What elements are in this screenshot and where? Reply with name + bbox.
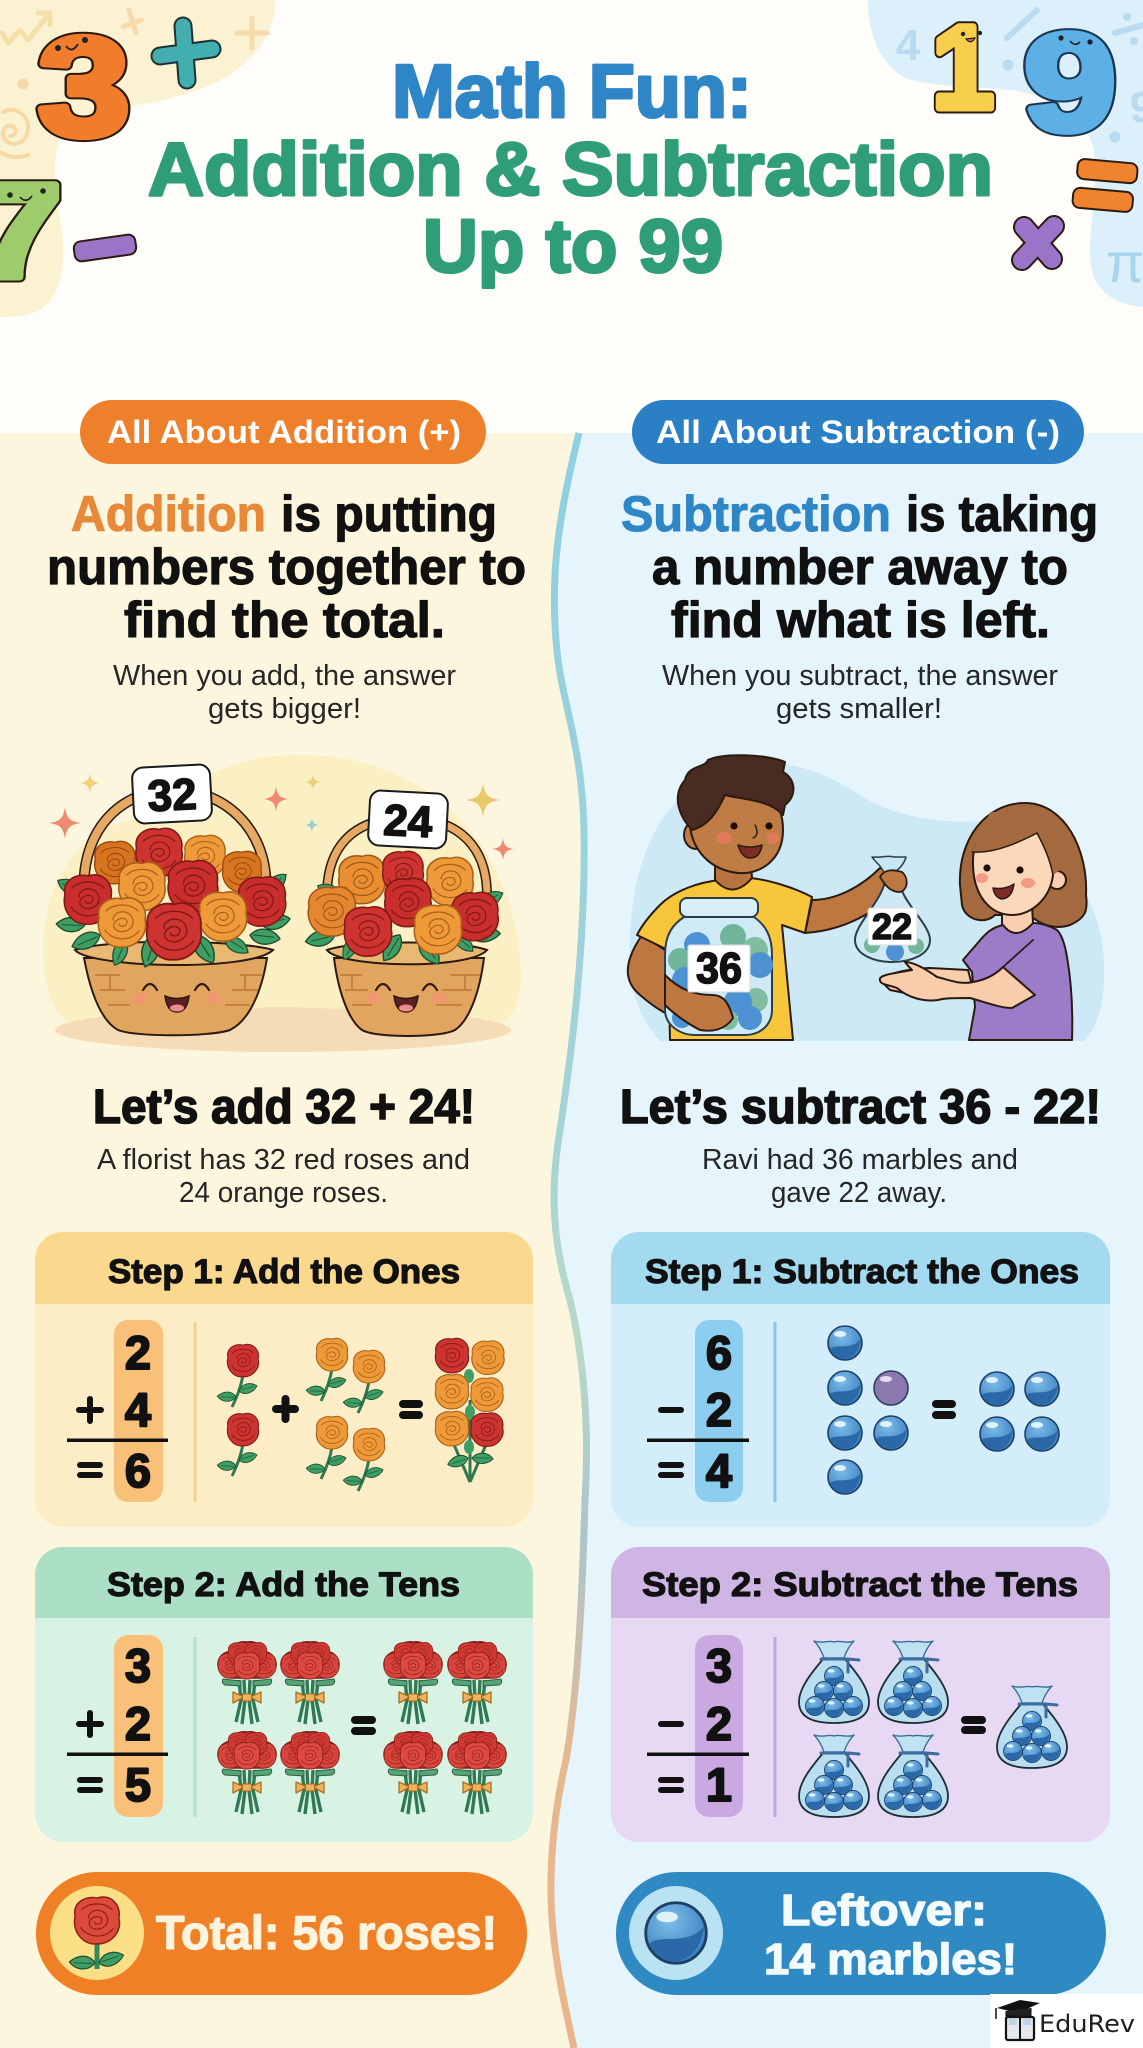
heading: subtraction definition: Subtraction	[621, 486, 891, 542]
pill heading: addition: All About Addition (+)	[107, 414, 461, 450]
column sum: 4	[125, 1383, 151, 1436]
logo: EduRev: EduRev	[1039, 2010, 1135, 2038]
digit 3: 3	[38, 8, 130, 165]
column sum: 3	[125, 1639, 151, 1692]
column difference: 6	[706, 1326, 732, 1379]
result banner: total roses: Total: 56 roses!	[156, 1906, 497, 1959]
column difference: 2	[706, 1697, 732, 1750]
panel: step 2 add the tens	[35, 1547, 533, 1842]
label: 22: 22	[872, 906, 912, 947]
panel: step 1 add the ones	[35, 1232, 533, 1527]
column difference	[647, 1635, 749, 1817]
digit 9: 9	[1024, 6, 1116, 160]
text: subtraction note: When you subtract, the answer	[662, 660, 1058, 692]
heading: addition definition: is putting	[281, 486, 497, 542]
logo: EduRev	[990, 1994, 1143, 2048]
heading: let's subtract: Let’s subtract 36 - 22!	[620, 1081, 1101, 1134]
bags: 3 tens minus 2 tens = 1 ten	[799, 1641, 1067, 1817]
text: florist story: 24 orange roses.	[179, 1177, 388, 1209]
equals sign	[1072, 158, 1138, 213]
panel: step 2 add the tens: Step 2: Add the Tens	[107, 1566, 460, 1604]
panel: addition background	[0, 433, 587, 2048]
minus sign	[73, 234, 137, 262]
text: florist story: A florist has 32 red roses and	[97, 1144, 470, 1176]
basket face	[365, 984, 447, 1012]
title	[148, 49, 993, 288]
panel: step 1 subtract the ones: Step 1: Subtract the Ones	[645, 1253, 1079, 1291]
heading: addition definition	[47, 486, 526, 648]
illustration: flower baskets	[43, 755, 521, 1052]
heading: subtraction definition	[621, 486, 1098, 648]
text: addition note: gets bigger!	[208, 693, 361, 725]
result banner: leftover marbles	[616, 1872, 1106, 1995]
heading: subtraction definition: is taking	[906, 486, 1098, 542]
text: florist story	[97, 1144, 470, 1209]
boy	[628, 755, 903, 1040]
column sum: 2	[125, 1326, 151, 1379]
decoration: top-right number cluster: 4	[896, 21, 921, 70]
girl	[880, 803, 1087, 1040]
multiply sign	[1022, 226, 1054, 260]
result banner: leftover marbles: 14 marbles!	[764, 1935, 1017, 1984]
digit 1: 1	[932, 2, 994, 134]
text: subtraction note: gets smaller!	[776, 693, 942, 725]
sparkles	[49, 773, 514, 860]
marbles: 6 minus 2 = 4	[828, 1326, 1059, 1494]
result banner: total roses	[36, 1872, 527, 1995]
illustration: boy gives marbles to girl	[628, 755, 1104, 1041]
label: 24: 24	[382, 796, 434, 847]
title: Addition & Subtraction	[148, 127, 993, 211]
column difference: 1	[706, 1758, 732, 1811]
decoration: top-left number cluster	[0, 0, 275, 317]
panel: step 1 add the ones: Step 1: Add the Ones	[108, 1253, 460, 1291]
plus sign	[160, 26, 212, 80]
label: 36: 36	[696, 944, 742, 993]
icon: marble	[629, 1886, 723, 1980]
heading: addition definition: find the total.	[124, 592, 445, 648]
pill heading: subtraction: All About Subtraction (-)	[656, 414, 1060, 450]
digit 9: 9	[1024, 6, 1116, 160]
title: Math Fun:	[392, 49, 752, 133]
icon: rose	[50, 1886, 144, 1980]
basket: 32 roses	[55, 764, 291, 1035]
text: Ravi story: gave 22 away.	[771, 1177, 947, 1209]
basket: 24 roses	[305, 790, 506, 1036]
column sum	[67, 1635, 168, 1817]
icon: graduation cap and book	[996, 2000, 1040, 2040]
jar of marbles	[665, 898, 773, 1035]
panel: step 2 subtract the tens: Step 2: Subtract the Tens	[642, 1566, 1078, 1604]
pill heading: addition	[80, 400, 486, 464]
decoration: top-right number cluster	[868, 0, 1143, 307]
heading: let's add: Let’s add 32 + 24!	[93, 1081, 475, 1134]
column difference: 2	[706, 1383, 732, 1436]
column difference: 3	[706, 1639, 732, 1692]
heading: addition definition: Addition	[71, 486, 266, 542]
pill heading: subtraction	[632, 400, 1084, 464]
panel: subtraction background	[500, 433, 1143, 2048]
bouquets: 2 tens + 2 tens = 4 tens	[218, 1642, 506, 1814]
column difference: 4	[706, 1444, 732, 1497]
digit 3: 3	[38, 8, 130, 165]
panel: step 2 subtract the tens	[611, 1547, 1110, 1842]
basket face	[132, 984, 221, 1012]
label: 24	[368, 790, 448, 849]
text: addition note: When you add, the answer	[113, 660, 456, 692]
column sum: 5	[125, 1758, 151, 1811]
heading: subtraction definition: a number away to	[652, 539, 1068, 595]
bag of marbles	[855, 856, 930, 962]
column sum	[67, 1320, 168, 1502]
label: 32: 32	[146, 770, 198, 821]
text: addition note	[113, 660, 456, 725]
column sum: 6	[125, 1444, 151, 1497]
column difference	[647, 1320, 749, 1502]
text: Ravi story: Ravi had 36 marbles and	[702, 1144, 1018, 1176]
label: 32	[132, 764, 212, 824]
heading: addition definition: numbers together to	[47, 539, 526, 595]
column sum: 2	[125, 1697, 151, 1750]
digit 1: 1	[932, 2, 994, 134]
text: subtraction note	[662, 660, 1058, 725]
roses: 2 red + 4 orange = 6	[217, 1338, 504, 1491]
result banner: leftover marbles: Leftover:	[781, 1886, 987, 1935]
title: Up to 99	[423, 204, 723, 288]
panel: step 1 subtract the ones	[611, 1232, 1110, 1527]
text: Ravi story	[702, 1144, 1018, 1209]
heading: subtraction definition: find what is left.	[671, 592, 1050, 648]
